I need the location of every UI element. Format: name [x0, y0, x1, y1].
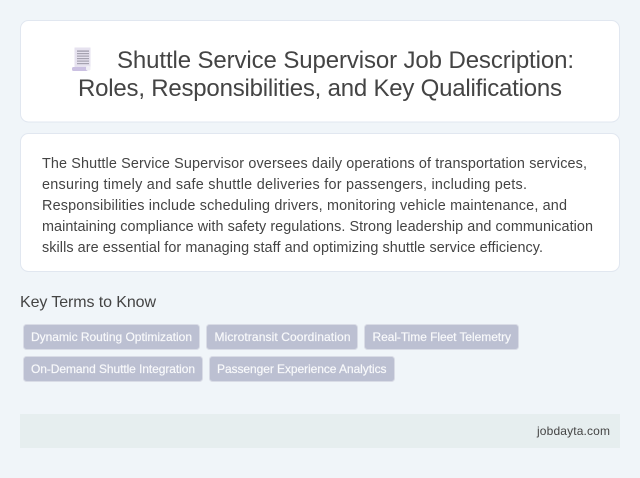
title: Shuttle Service Supervisor Job Description: — [117, 47, 574, 74]
title — [78, 47, 574, 102]
tag: passenger experience analytics — [210, 356, 394, 382]
tag: real-time fleet telemetry: Real-Time Fleet Telemetry — [372, 330, 511, 344]
tag: passenger experience analytics: Passenger Experience Analytics — [217, 362, 386, 376]
tag: microtransit coordination — [206, 324, 358, 350]
text block: job description: ensuring timely and safe shuttle deliveries for passengers, including pets. — [42, 177, 527, 193]
text block: job description — [42, 156, 593, 256]
footer bar — [20, 414, 620, 448]
tag: dynamic routing optimization — [24, 324, 200, 350]
footer source text: jobdayta.com — [536, 424, 610, 438]
text block: job description: skills are essential for managing staff and optimizing shuttle service efficiency. — [42, 240, 543, 256]
tag: dynamic routing optimization: Dynamic Routing Optimization — [31, 330, 192, 344]
text block: job description: The Shuttle Service Supervisor oversees daily operations of transportation services, — [42, 156, 587, 172]
icon: document scroll — [72, 48, 90, 71]
tag: on-demand shuttle integration — [24, 356, 202, 382]
panel: title card — [20, 20, 620, 122]
heading: key terms: Key Terms to Know — [20, 294, 156, 311]
title: Roles, Responsibilities, and Key Qualifications — [78, 75, 562, 102]
tag: on-demand shuttle integration: On-Demand Shuttle Integration — [31, 362, 195, 376]
panel: description card — [20, 134, 620, 272]
text block: job description: Responsibilities include scheduling drivers, monitoring vehicle maintenance, and — [42, 198, 567, 214]
tag: real-time fleet telemetry — [364, 324, 518, 350]
tag: microtransit coordination: Microtransit Coordination — [214, 330, 350, 344]
tag list — [24, 324, 518, 382]
text block: job description: maintaining compliance with safety regulations. Strong leadership and communication — [42, 219, 593, 235]
